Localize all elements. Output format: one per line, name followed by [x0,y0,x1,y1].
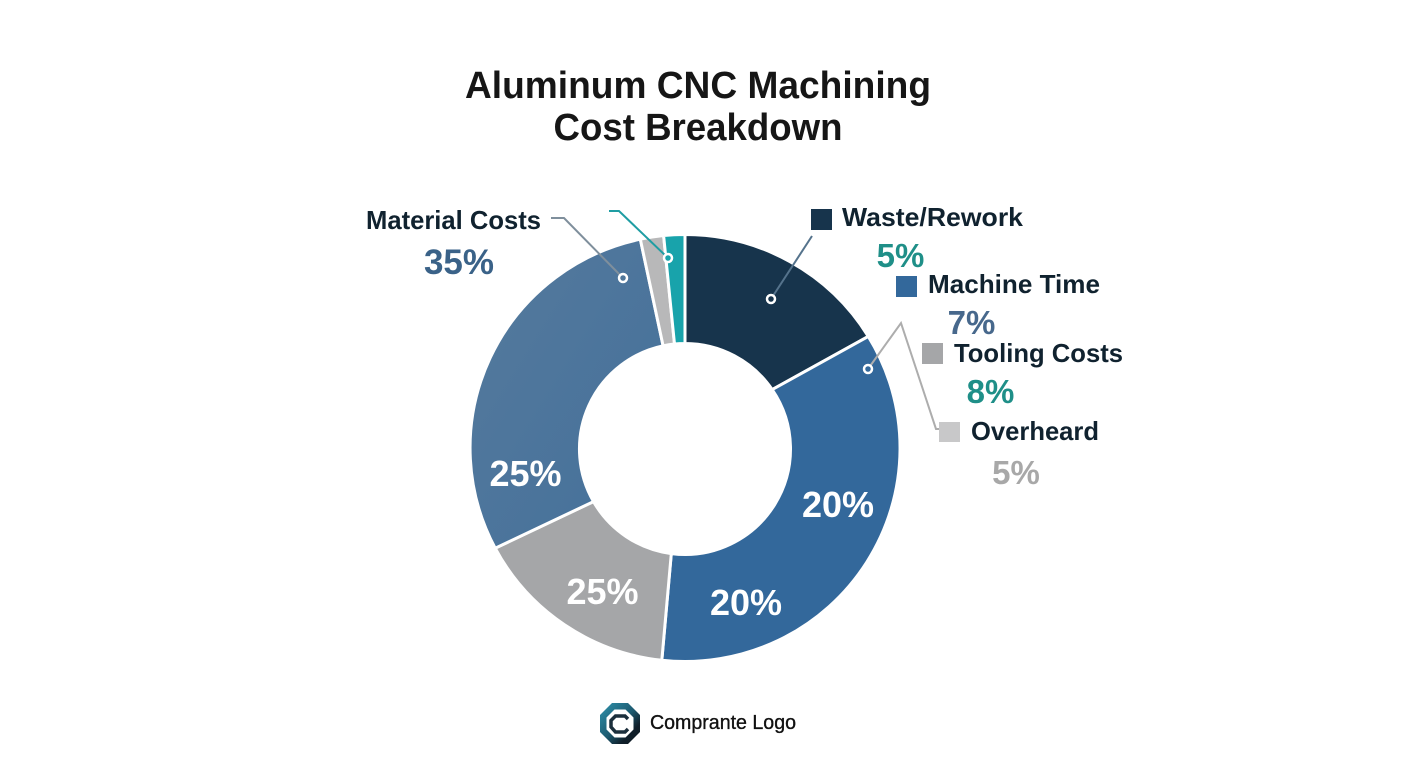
donut chart [470,234,900,662]
legend: waste/rework: 5% [877,237,924,274]
segment: waste/rework navy [685,234,868,390]
icon: octagon C [600,703,640,744]
material costs callout: 35% [424,243,494,282]
legend: overhead: 5% [992,454,1040,491]
segment: material steel blue [470,239,663,548]
leader: waste/rework [767,236,812,303]
segment: overhead light grey [640,236,674,346]
title [465,65,931,149]
label 20% upper: 20% [802,484,874,525]
label 20% lower: 20% [710,582,782,623]
material costs callout: Material Costs [366,205,541,235]
legend: tooling costs [922,338,1123,410]
legend: machine time [896,269,1100,341]
material costs callout [366,205,541,282]
title: Cost Breakdown [554,107,842,149]
legend: waste/rework [811,202,1024,274]
leader: overhead [864,323,940,429]
logo text: Comprante Logo [650,712,796,734]
title: Aluminum CNC Machining [465,65,931,107]
label 25% steel blue: 25% [489,453,562,494]
legend: tooling costs: Tooling Costs [954,338,1123,368]
leader: material costs [551,218,627,282]
legend: overhead: Overheard [971,416,1099,446]
legend: tooling costs: 8% [967,373,1014,410]
legend: waste/rework: Waste/Rework [842,202,1024,232]
legend: machine time: Machine Time [928,269,1100,299]
segment: teal [664,234,685,344]
legend: machine time: 7% [948,304,995,341]
logo [600,703,796,744]
leader: teal segment [609,211,672,262]
segment: tooling grey [495,502,671,660]
label 25% grey: 25% [566,571,639,612]
legend: overhead [939,416,1099,491]
segment: machine time blue [662,336,900,662]
